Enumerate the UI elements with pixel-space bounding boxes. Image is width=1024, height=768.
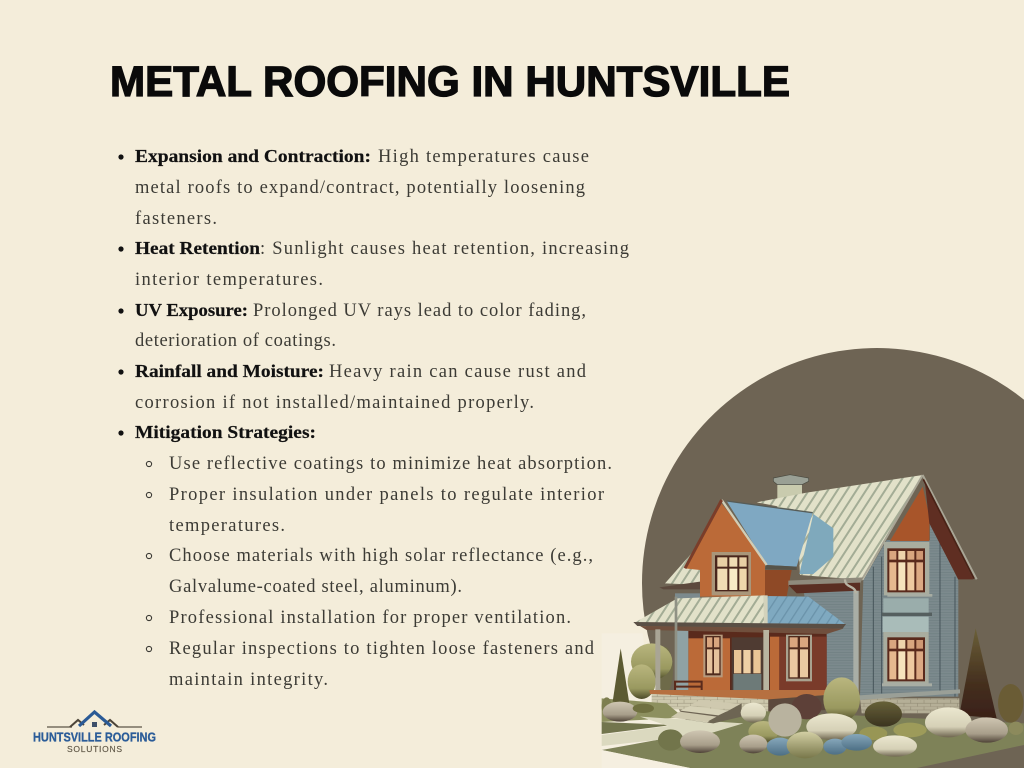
upper gable cladding and trim bbox=[862, 475, 977, 580]
front steps bbox=[670, 700, 742, 723]
sub-list: strategies: Regular inspections to tighten loose fasteners and bbox=[169, 639, 595, 659]
trees bbox=[613, 628, 997, 718]
bullet: rainfall and moisture: Rainfall and Moisture: bbox=[135, 361, 324, 381]
sub-list: strategies: Use reflective coatings to minimize heat absorption. bbox=[169, 454, 612, 474]
left small roof bbox=[659, 540, 703, 603]
bullet: heat retention: : Sunlight causes heat retention, increasing bbox=[260, 239, 629, 259]
lower right window bbox=[882, 632, 932, 686]
logo name: HUNTSVILLE ROOFING bbox=[33, 730, 156, 744]
porch left window bbox=[703, 635, 723, 677]
main roof bbox=[757, 475, 923, 580]
upper right window bbox=[884, 542, 932, 597]
bullet: expansion and contraction bbox=[118, 146, 589, 229]
porch door bbox=[732, 637, 763, 692]
sub-list: strategies: Choose materials with high solar reflectance (e.g., bbox=[169, 546, 593, 566]
bullet: rainfall and moisture: Heavy rain can cause rust and bbox=[329, 362, 587, 382]
title: METAL ROOFING IN HUNTSVILLE bbox=[110, 58, 790, 106]
sub-list: strategies: temperatures. bbox=[169, 516, 285, 536]
sub-list: strategies: Galvalume-coated steel, aluminum). bbox=[169, 577, 462, 597]
porch right window bbox=[786, 635, 812, 681]
bullet: heat retention: interior temperatures. bbox=[135, 270, 323, 290]
bullet: UV exposure: deterioration of coatings. bbox=[135, 331, 336, 351]
front gable and blue dormer roof bbox=[685, 500, 813, 597]
back shrubs by the porch bbox=[628, 643, 673, 699]
dormer window bbox=[712, 552, 751, 595]
bullet: UV exposure bbox=[118, 300, 586, 351]
sub-list: strategies: Proper insulation under panels to regulate interior bbox=[169, 485, 604, 505]
logo: Huntsville Roofing Solutions bbox=[33, 712, 156, 754]
bullet: expansion and contraction: fasteners. bbox=[135, 209, 217, 229]
porch floor and stone base bbox=[649, 689, 960, 713]
porch columns bbox=[655, 597, 769, 697]
bullet: mitigation strategies: Mitigation Strategies: bbox=[135, 422, 316, 442]
sub-list: strategies bbox=[146, 454, 612, 690]
bullet: expansion and contraction: High temperatures cause bbox=[378, 147, 589, 167]
front porch walls bbox=[677, 630, 827, 693]
bullet: UV exposure: Prolonged UV rays lead to color fading, bbox=[253, 301, 586, 321]
chimney bbox=[773, 475, 809, 508]
bullet list: roofing factors bbox=[118, 146, 629, 690]
icon: roofline bbox=[47, 712, 142, 727]
porch roof bbox=[633, 595, 846, 634]
lawn and path bbox=[602, 698, 1024, 768]
bullet: heat retention: Heat Retention bbox=[135, 238, 260, 258]
porch bench bbox=[675, 682, 702, 692]
sub-list: strategies: maintain integrity. bbox=[169, 670, 328, 690]
bullet: expansion and contraction: Expansion and Contraction: bbox=[135, 146, 371, 166]
bullet: heat retention bbox=[118, 238, 629, 290]
bullet: mitigation strategies bbox=[118, 422, 612, 690]
brown circle backdrop bbox=[642, 348, 1024, 768]
bullet: expansion and contraction: metal roofs to expand/contract, potentially loosening bbox=[135, 178, 585, 198]
sub-list: strategies: Professional installation for proper ventilation. bbox=[169, 608, 571, 628]
cream background behind lower left of the yard bbox=[602, 633, 667, 768]
cream corner below the yard bbox=[602, 750, 690, 768]
shrubs and flower beds bbox=[602, 677, 1023, 758]
illustration: house with metal roof bbox=[602, 475, 1024, 768]
logo tagline: SOLUTIONS bbox=[67, 744, 122, 754]
bullet: UV exposure: UV Exposure: bbox=[135, 300, 248, 320]
grey body walls bbox=[803, 523, 958, 697]
bullet: rainfall and moisture: corrosion if not installed/maintained properly. bbox=[135, 393, 534, 413]
wall panels between windows bbox=[882, 598, 932, 632]
middle eave and gutter bbox=[788, 577, 863, 593]
bullet: rainfall and moisture bbox=[118, 361, 587, 413]
